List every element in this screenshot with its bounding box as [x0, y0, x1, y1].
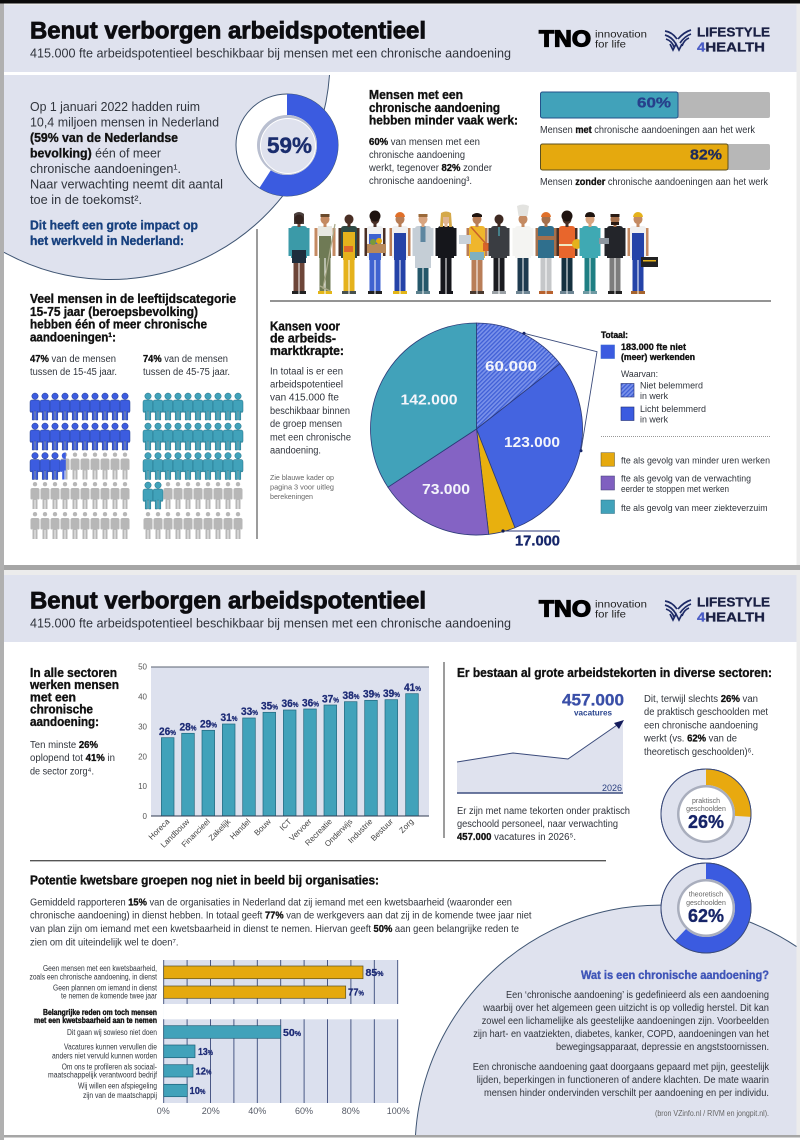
logo: TNO [539, 26, 647, 52]
bar chart: sectors: Vervoer [288, 817, 314, 843]
logo: Lifestyle 4Health: LIFESTYLE [697, 24, 770, 40]
heading: age category: Veel mensen in de leeftijdscategorie [30, 292, 236, 306]
callout lines to legend [522, 332, 597, 452]
info text: wat is een chronische aandoening: Een chronische aandoening gaat doorgaans gepaard met pijn, geestelijk [473, 1062, 770, 1073]
note: Zie blauwe kader op [270, 473, 334, 482]
bar: 82%: Mensen zonder chronische aandoeningen aan het werk [540, 177, 769, 188]
heading: sectors [29, 666, 119, 729]
bar chart: sectors: 29% [200, 718, 218, 730]
bar chart: sectors: 33% [241, 706, 259, 718]
bar chart: sectors: 0 [143, 812, 148, 821]
info circle background [416, 905, 796, 1135]
horizontal bar chart: organisations: maatschappelijk verantwoord bedrijf [48, 1071, 158, 1080]
heading: Kansen voor de arbeidsmarktkrapte: de arbeids- [270, 332, 336, 346]
info text: wat is een chronische aandoening: mensen hinder ondervinden verschilt per aandoening en per individu. [484, 1088, 769, 1099]
text: 47%: tussen de 15-45 jaar. [30, 367, 117, 378]
legend [601, 330, 770, 514]
heading: sectors: chronische [30, 702, 93, 716]
impact statement: Dit heeft een grote impact op [30, 218, 198, 232]
pie labels: 123.000 [504, 435, 560, 451]
horizontal bar chart: organisations: Geen mensen met een kwetsbaarheid, [43, 964, 157, 973]
bar chart: sectors: 39% [383, 688, 401, 700]
horizontal bar chart: organisations: met een kwetsbaarheid aan te nemen [34, 1016, 157, 1025]
text: 26% vs 62%: theoretisch geschoolden)⁶. [644, 747, 754, 758]
text: 47% [30, 354, 117, 378]
heading: Kansen voor de arbeidsmarktkrapte: Kansen voor [270, 320, 340, 334]
text: 60% vs 82% [368, 137, 493, 187]
text: total potential: aandoening. [270, 446, 321, 456]
heading: sectors: In alle sectoren [30, 666, 117, 680]
bar chart: sectors: 41% [404, 682, 422, 694]
donut: 62%: geschoolden [686, 900, 726, 907]
text: total potential: met een chronische [270, 432, 351, 444]
slice: 73.000 [388, 429, 489, 535]
text: 26% vs 62%: een chronische aandoening [644, 720, 758, 732]
bar chart: sectors: Bouw [252, 817, 273, 838]
bar chart: sectors: 26% [159, 726, 177, 738]
info text: wat is een chronische aandoening: waarbij over het algemeen geen uitzicht is op volledig herstel. Dit kan [482, 1003, 769, 1014]
slice: 17.000 [476, 429, 515, 534]
pie labels: 142.000 [400, 392, 458, 408]
intro text: toe in de toekomst². [30, 193, 142, 207]
horizontal bar chart: organisations: Geen plannen om iemand in dienst [53, 984, 158, 993]
text: kwetsbare groepen: Gemiddeld rapporteren 15% van de organisaties in Nederland dat zij iemand met een kwetsbaarheid (waaronder een [30, 896, 512, 908]
slice: 142.000 [370, 323, 476, 487]
logo: Lifestyle 4Health: LIFESTYLE [697, 594, 770, 610]
bar: 60%: Mensen met chronische aandoeningen aan het werk [540, 125, 756, 136]
horizontal bar chart: organisations: 12% [196, 1066, 212, 1078]
vertical divider [256, 229, 258, 539]
pie labels [400, 359, 560, 498]
heading: age category [30, 292, 236, 344]
intro text [30, 100, 223, 207]
bar chart: sectors: 36% [302, 698, 320, 710]
heading: sectors: met een [30, 690, 76, 704]
bar: 60% [540, 92, 770, 136]
donut: 62%: 62% [688, 906, 724, 926]
horizontal bar chart: organisations: anders niet vervuld kunnen worden [52, 1052, 157, 1061]
text: 26% to 41%: Ten minste 26% [30, 740, 98, 751]
pictogram: 47% of 15-45 years [30, 393, 130, 539]
bar chart: sectors: 40 [138, 692, 148, 702]
legend: fte als gevolg van meer ziekteverzuim [621, 503, 768, 513]
text: 74% [143, 354, 230, 378]
bar chart: sectors: 50 [138, 662, 148, 672]
bar: 82%: 82% [690, 148, 722, 164]
subtitle: 415.000 fte arbeidspotentieel beschikbaar bij mensen met een chronische aandoening [30, 616, 511, 630]
text: tekorten: 457.000 vacatures in 2026⁵. [457, 832, 576, 843]
slice: 123.000 [476, 364, 583, 528]
donut: 26%: geschoolden [686, 806, 726, 813]
horizontal bar chart: organisations: 80% [342, 1106, 360, 1116]
bar chart: sectors: 35% [261, 700, 279, 712]
bar chart: sectors: Recreatie [303, 817, 334, 848]
pictogram: 74% of 45-75 years [143, 393, 243, 539]
text: total potential: de groep mensen [270, 419, 342, 430]
horizontal bar chart: organisations: Belangrijke reden om toch mensen [43, 1008, 157, 1017]
bar chart: sectors: 39% [363, 688, 381, 700]
logo: TNO: TNO [539, 26, 591, 52]
legend: fte als gevolg van minder uren werken [621, 456, 770, 466]
heading: Kansen voor de arbeidsmarktkrapte [270, 320, 344, 358]
text: 26% to 41%: oplopend tot 41% in [30, 753, 115, 764]
info text: wat is een chronische aandoening: (bron VZinfo.nl / RIVM en jongpit.nl). [655, 1109, 769, 1118]
horizontal bar chart: organisations [30, 960, 410, 1116]
legend: Niet belemmerd [640, 380, 703, 390]
pie labels: 60.000 [485, 359, 537, 375]
bar chart: sectors: Zakelijk [207, 816, 233, 843]
panel: page 2 [4, 575, 796, 1135]
info text: wat is een chronische aandoening: Wat is een chronische aandoening? [581, 970, 769, 982]
text: total potential: beschikbaar binnen [270, 406, 350, 417]
title: Benut verborgen arbeidspotentieel [30, 588, 426, 614]
text: total potential: arbeidspotentieel [270, 380, 343, 390]
bar chart: sectors: 28% [180, 722, 197, 734]
impact statement: het werkveld in Nederland: [30, 234, 184, 248]
logo: Lifestyle 4Health [665, 24, 770, 54]
bar chart: sectors: 37% [322, 694, 340, 706]
subtitle: 415.000 fte arbeidspotentieel beschikbaar bij mensen met een chronische aandoening [30, 46, 511, 60]
heading: arbeidstekorten: Er bestaan al grote arbeidstekorten in diverse sectoren: [457, 666, 772, 680]
bar: 60%: 60% [637, 96, 671, 112]
slice: 60.000 [476, 323, 560, 429]
text: 26% to 41%: de sector zorg⁴. [30, 766, 94, 778]
horizontal bar chart: organisations: 50% [283, 1027, 302, 1039]
horizontal bar chart: organisations: Dit gaan wij sowieso niet doen [67, 1028, 157, 1037]
legend: Waarvan: [621, 369, 658, 379]
bar chart: sectors: Landbouw [159, 817, 192, 850]
bar chart: sectors: Handel [228, 817, 253, 841]
donut: 26% [661, 769, 751, 859]
logo: TNO [539, 596, 647, 622]
header band page 1 [4, 5, 796, 72]
horizontal bar chart: organisations: Om ons te profileren als sociaal- [62, 1062, 157, 1071]
text: 26% to 41% [30, 740, 115, 778]
text: tekorten [457, 806, 630, 843]
text: total potential [270, 366, 351, 456]
heading: minder vaak werk: hebben minder vaak werk: [369, 114, 518, 128]
horizontal bar chart: organisations: 40% [248, 1106, 266, 1116]
bar chart: sectors: Financieel [180, 817, 212, 849]
intro text: Naar verwachting neemt dit aantal [30, 178, 223, 192]
heading: age category: aandoeningen¹: [30, 330, 116, 344]
horizontal bar chart: organisations: 77% [348, 986, 365, 998]
legend: Totaal: [601, 330, 628, 340]
text: tekorten: geschoold personeel, naar verwachting [457, 819, 618, 830]
bar chart: sectors: ICT [278, 817, 293, 833]
bar chart: sectors: 38% [342, 690, 360, 702]
text: 26% vs 62%: Dit, terwijl slechts 26% van [644, 694, 758, 705]
note [270, 473, 334, 501]
intro text: 10,4 miljoen mensen in Nederland [30, 116, 219, 130]
bar chart: sectors: Bestuur [369, 817, 395, 843]
legend: 183.000 fte niet [621, 342, 686, 352]
donut: 62%: theoretisch [689, 892, 723, 898]
text: 26% vs 62% [643, 694, 768, 758]
bar chart: sectors: 31% [220, 712, 238, 724]
horizontal bar chart: organisations: Wij willen een afspiegeling [78, 1082, 157, 1091]
bar chart: sectors: Onderwijs [323, 817, 354, 849]
bar chart: sectors: 20 [138, 752, 148, 762]
area chart: vacancies: 2026 [602, 783, 622, 793]
donut: 59%: 59% [267, 133, 312, 158]
bar: 82% [540, 144, 770, 188]
horizontal bar chart: organisations: 85% [366, 967, 384, 979]
heading: sectors: aandoening: [30, 715, 99, 729]
heading: minder vaak werk: Mensen met een [369, 88, 463, 102]
legend: fte als gevolg van de verwachting [621, 474, 751, 484]
info text: wat is een chronische aandoening: bewegingsapparaat, depressie en angststoornissen. [556, 1042, 769, 1053]
info text: wat is een chronische aandoening: Een ‘chronische aandoening’ is gedefinieerd als een aandoening [506, 990, 769, 1001]
text: kwetsbare groepen: van plan zijn om iemand met een kwetsbaarheid in dienst te nemen. Hiervan geeft 50% aan geen belangrijke reden te [30, 923, 519, 935]
bar chart: sectors: 10 [138, 782, 148, 791]
area chart: vacancies: vacatures [574, 708, 612, 718]
callout: 17.000: 17.000 [515, 534, 560, 550]
legend: in werk [640, 391, 668, 401]
horizontal divider [30, 860, 606, 862]
text: total potential: van 415.000 fte [270, 392, 339, 404]
horizontal bar chart: organisations: 10% [190, 1085, 206, 1097]
text: 60% vs 82%: werkt, tegenover 82% zonder [368, 163, 493, 174]
note: berekeningen [270, 492, 313, 501]
heading: age category: hebben één of meer chronische [30, 318, 207, 332]
horizontal bar chart: organisations: 100% [387, 1106, 410, 1116]
text: 60% vs 82%: chronische aandoening [369, 150, 465, 161]
heading: minder vaak werk: chronische aandoening [369, 101, 500, 115]
panel: page 1 [4, 5, 796, 565]
impact statement [30, 218, 198, 248]
info text: wat is een chronische aandoening: zowel een lichamelijke als geestelijke aandoeningen zijn. Voorbeelden [482, 1016, 769, 1027]
heading: age category: 15-75 jaar (beroepsbevolking) [30, 305, 198, 319]
intro text: chronische aandoeningen¹. [30, 162, 181, 176]
donut: 59% [236, 94, 338, 196]
logo: TNO: for life [595, 38, 626, 50]
bar chart: sectors: Zorg [397, 817, 415, 835]
text: 26% vs 62%: de praktisch geschoolden met [644, 707, 768, 718]
info text: wat is een chronische aandoening: lijden, beperkingen in functioneren of andere klachten. De mate waarin [477, 1075, 769, 1086]
legend: (meer) werkenden [621, 352, 695, 362]
text: 60% vs 82%: 60% van mensen met een [369, 137, 480, 148]
text: 60% vs 82%: chronische aandoening³. [369, 176, 472, 187]
logo: TNO: innovation [595, 598, 647, 610]
logo: Lifestyle 4Health [665, 594, 770, 624]
horizontal bar chart: organisations: 60% [295, 1106, 313, 1116]
text: 26% vs 62%: werkt (vs. 62% van de [643, 734, 737, 744]
horizontal bar chart: organisations: 0% [157, 1106, 170, 1116]
intro circle segment [4, 75, 330, 280]
text: 74%: 74% van de mensen [143, 354, 228, 365]
text: kwetsbare groepen: chronische aandoening) in dienst hebben. In totaal geeft 77% van de werkgevers aan dat zij in de komende twee jaar niet [30, 910, 532, 922]
info text: wat is een chronische aandoening [473, 970, 770, 1118]
heading: Kansen voor de arbeidsmarktkrapte: marktkrapte: [270, 344, 344, 358]
heading: sectors: werken mensen [29, 678, 119, 692]
text: total potential: In totaal is er een [270, 366, 343, 378]
horizontal bar chart: organisations: zijn van de maatschappij [83, 1091, 157, 1100]
donut: 26%: praktisch [692, 798, 720, 805]
bar chart: sectors [138, 662, 429, 850]
title: Benut verborgen arbeidspotentieel [30, 18, 426, 44]
vertical divider [443, 662, 445, 838]
text: kwetsbare groepen [30, 896, 532, 948]
donut: 62% [661, 863, 751, 953]
illustration: row of workers [288, 204, 658, 294]
text: 74%: tussen de 45-75 jaar. [143, 367, 230, 378]
legend: Licht belemmerd [640, 404, 706, 414]
bar chart: sectors: 36% [282, 698, 299, 710]
logo: TNO: for life [595, 608, 626, 620]
callout: 17.000 [501, 529, 560, 550]
heading: minder vaak werk [369, 88, 518, 128]
logo: TNO: innovation [595, 28, 647, 40]
bar chart: sectors: Horeca [147, 817, 172, 842]
note: pagina 3 voor uitleg [270, 482, 334, 492]
bar chart: sectors: 30 [138, 722, 148, 732]
legend: eerder te stoppen met werken [621, 484, 729, 494]
logo: Lifestyle 4Health: 4HEALTH [697, 40, 765, 54]
horizontal bar chart: organisations: te nemen de komende twee jaar [61, 992, 157, 1001]
bar chart: sectors: Industrie [346, 817, 375, 845]
legend: in werk [640, 414, 668, 424]
horizontal bar chart: organisations: 13% [198, 1046, 214, 1058]
header band page 2 [4, 575, 796, 642]
info text: wat is een chronische aandoening: zijn hart- en vaatziekten, diabetes, kanker, COPD, aandoeningen van het [473, 1029, 769, 1040]
horizontal divider [270, 300, 771, 302]
logo: TNO: TNO [539, 596, 591, 622]
intro text: bevolking) één of meer [30, 146, 161, 160]
text: 47%: 47% van de mensen [30, 354, 116, 365]
heading: kwetsbare groepen: Potentie kwetsbare groepen nog niet in beeld bij organisaties: [30, 874, 379, 888]
area chart: vacancies [457, 690, 624, 793]
text: kwetsbare groepen: zien om dit uiteindelijk wel te doen⁷. [30, 936, 178, 948]
intro text: (59% van de Nederlandse [30, 131, 178, 145]
pie chart [370, 323, 583, 535]
donut: 26%: 26% [688, 812, 724, 832]
logo: Lifestyle 4Health: 4HEALTH [697, 610, 765, 624]
horizontal bar chart: organisations: zoals een chronische aandoening, in dienst [30, 972, 158, 982]
intro text: Op 1 januari 2022 hadden ruim [30, 100, 200, 114]
pie labels: 73.000 [422, 482, 470, 498]
text: tekorten: Er zijn met name tekorten onder praktisch [457, 806, 630, 817]
horizontal bar chart: organisations: 20% [202, 1106, 220, 1116]
horizontal bar chart: organisations: Vacatures kunnen vervullen die [64, 1043, 157, 1052]
area chart: vacancies: 457.000 [562, 690, 624, 710]
